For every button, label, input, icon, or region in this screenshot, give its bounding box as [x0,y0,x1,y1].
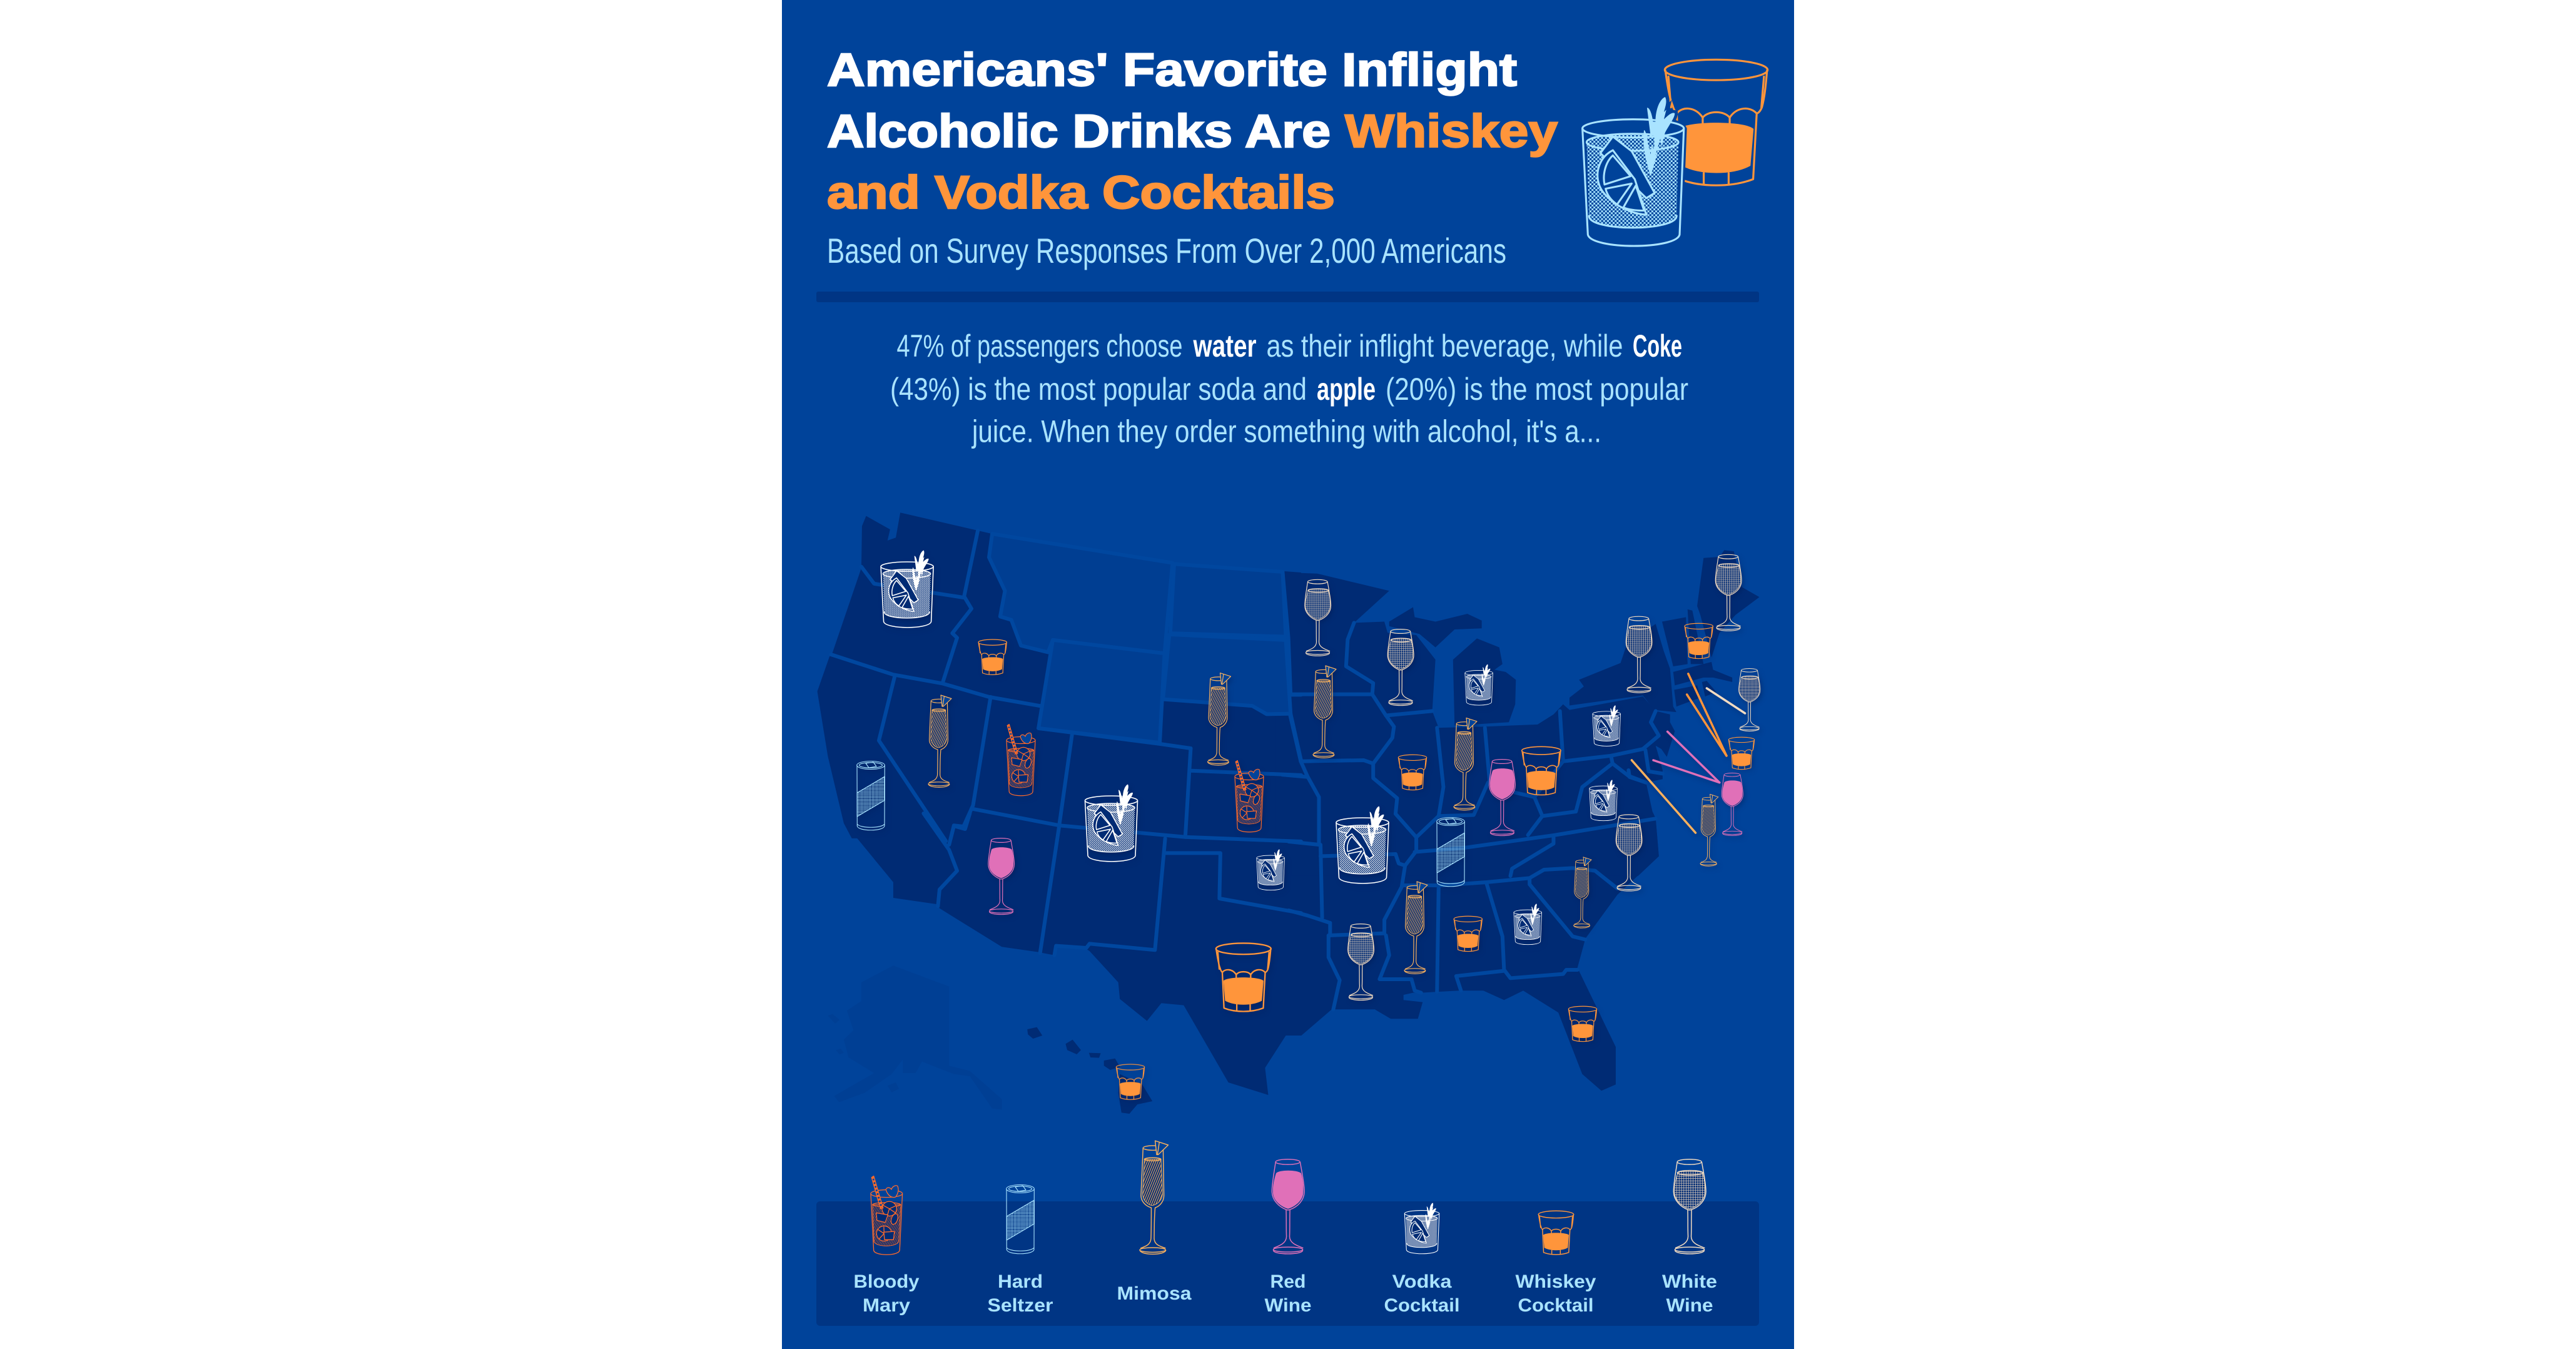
leader line: New Hampshire whiskey [1688,674,1727,756]
icon: whiskey Hawaii [1116,1064,1145,1099]
leader line: Vermont white wine [1706,688,1745,713]
icon: whiskey callout [1728,737,1755,770]
text block: intro paragraph [890,328,1688,449]
icon: white wine Louisiana [1348,924,1374,1000]
icon: mimosa callout [1700,794,1718,866]
icon: vodka cocktail Virginia [1590,780,1617,821]
text block: intro paragraph: (43%) is the most popular soda and [890,372,1307,407]
icon: whiskey Alabama [1454,916,1483,952]
legend: Bloody Mary [853,1176,920,1316]
icon: whiskey Illinois [1398,755,1427,790]
icon: vodka cocktail Georgia [1514,904,1541,945]
legend: Mimosa: Mimosa [1117,1283,1192,1304]
legend: Whiskey Cocktail: Cocktail [1518,1295,1594,1316]
heading: title: Alcoholic Drinks Are [827,105,1331,157]
text block: intro paragraph: juice. When they order something with alcohol, it's a... [971,414,1601,449]
icon: whiskey Idaho/Oregon [978,639,1007,675]
divider bar [816,292,1759,302]
icon: mimosa South Carolina [1574,857,1591,928]
legend: Bloody Mary: Mary [863,1295,910,1316]
icon: vodka cocktail Washington [881,551,933,628]
legend: Red Wine: Red [1270,1271,1306,1292]
panel: blue background [782,0,1794,1349]
heading: title: Americans' Favorite Inflight [827,44,1517,96]
legend: Hard Seltzer: Seltzer [987,1295,1053,1316]
icon: header whiskey glass [1665,59,1768,185]
heading: title: Whiskey [1345,105,1558,157]
icon: whiskey Ohio [1522,746,1561,795]
leader line: Delaware red wine [1653,760,1720,783]
icon: hard seltzer Tennessee [1437,817,1464,887]
icon: white wine New York [1626,616,1652,693]
icon: white wine Wisconsin [1387,629,1414,706]
legend panel [816,1141,1759,1326]
icon: vodka cocktail Oklahoma [1257,849,1284,890]
icon: white wine North Carolina [1616,815,1642,891]
legend: Hard Seltzer [987,1185,1053,1316]
icon: vodka cocktail Michigan [1465,664,1493,705]
legend: Hard Seltzer: Hard [998,1271,1043,1292]
text block: intro paragraph: apple [1317,372,1376,407]
text block: intro paragraph: 47% of passengers choose [897,328,1182,364]
heading: title: and Vodka Cocktails [827,166,1335,218]
icon: mimosa Indiana [1454,718,1477,810]
legend: Vodka Cocktail: Vodka [1392,1271,1452,1292]
legend: White Wine: Wine [1666,1295,1713,1316]
legend: Mimosa [1117,1141,1192,1304]
leader line: New Jersey red wine [1668,731,1720,783]
icon: mimosa Nevada [928,695,951,787]
Hawaii [1027,1027,1152,1114]
icon: white wine Minnesota [1305,579,1331,656]
icon: red wine Kentucky [1489,760,1515,836]
legend: Red Wine: Wine [1265,1295,1311,1316]
icon: hard seltzer California [857,761,885,830]
Alaska [828,965,1001,1109]
icon: mimosa Nebraska [1207,673,1231,765]
icon: vodka cocktail Missouri [1336,806,1389,883]
subtitle: Based on Survey Responses From Over 2,000 Americans [827,231,1506,270]
icon: whiskey New Hampshire [1685,623,1713,659]
icon: whiskey Texas [1216,943,1271,1011]
heading: title [827,44,1558,218]
icon: bloody mary Utah [1007,725,1035,796]
icon: red wine callout [1722,773,1743,835]
leader line: Massachusetts whiskey [1687,695,1727,756]
text block: intro paragraph: (20%) is the most popular [1386,372,1688,407]
map of the United States [818,512,1760,1114]
icon: bloody mary Kansas [1235,761,1264,832]
icon: white wine Maine [1715,554,1742,631]
text block: intro paragraph: water [1193,328,1256,364]
text block: intro paragraph: Coke [1633,328,1682,364]
icon: mimosa Mississippi [1404,882,1427,974]
legend: Vodka Cocktail [1384,1203,1460,1316]
icon: white wine Vermont callout [1739,668,1760,731]
legend: Bloody Mary: Bloody [853,1271,920,1292]
legend: Whiskey Cocktail: Whiskey [1515,1271,1596,1292]
leader line: Maryland mimosa [1631,760,1695,833]
legend: Vodka Cocktail: Cocktail [1384,1295,1460,1316]
icon: vodka cocktail Pennsylvania [1593,705,1620,746]
icon: red wine Arizona [988,838,1015,915]
text block: intro paragraph: as their inflight beverage, while [1266,328,1623,364]
icon: vodka cocktail Colorado [1085,785,1137,862]
legend: White Wine: White [1662,1271,1717,1292]
icon: header vodka cocktail [1583,97,1684,246]
legend: Whiskey Cocktail [1515,1211,1596,1316]
icon: mimosa Iowa [1313,666,1336,758]
icon: whiskey Florida [1568,1006,1597,1042]
map drink icons [857,551,1760,1099]
legend: Red Wine [1265,1159,1311,1316]
legend: White Wine [1662,1159,1717,1316]
